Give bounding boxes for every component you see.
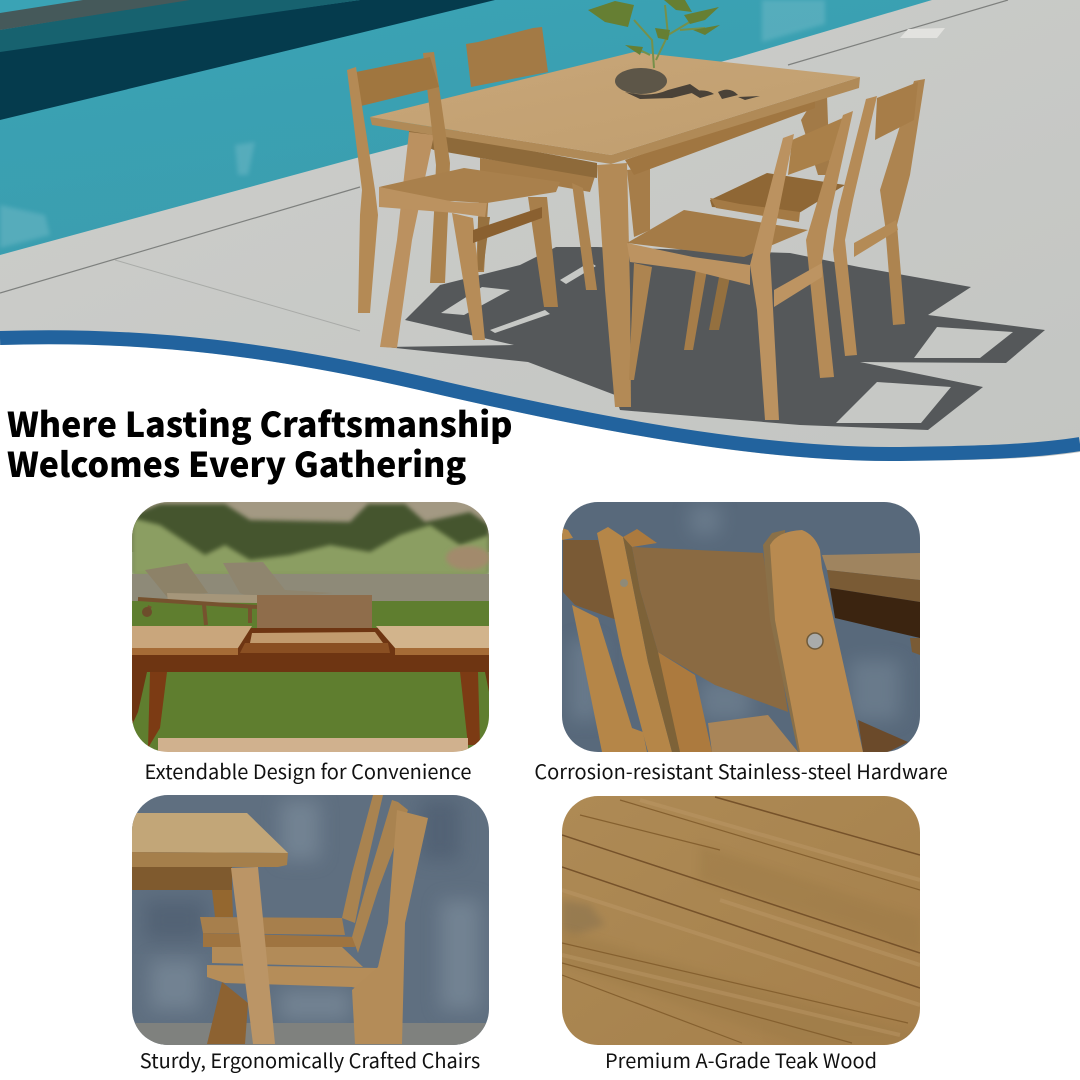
table leg [910,638,920,655]
table edge [827,570,920,602]
post 3 top [623,529,657,547]
drain cover [900,28,945,38]
wall dark blotches [145,800,460,940]
backrest [875,82,918,140]
table apron right [625,95,815,175]
stretcher [473,207,542,243]
photo: chair backrest close-up [562,502,920,752]
right leg [528,197,558,307]
blue-grey wall [132,795,489,1045]
fine seams [562,800,920,1043]
table top [822,553,920,580]
wall blotches [150,800,480,1020]
right post [806,111,853,378]
front leg [629,263,652,380]
rear leg [572,183,597,290]
panel: teak wood [562,796,920,1074]
bolt [807,633,823,649]
rear post [342,795,383,923]
deep pool shadow [0,0,495,120]
pink flowers [446,546,490,570]
concrete deck [0,0,1080,470]
table leg right [801,96,830,175]
leaves [588,0,720,55]
table left leaf [132,626,252,648]
rear table leg top [212,890,233,917]
backrest [466,27,548,87]
raised leaf [257,595,372,628]
far left leg [132,672,147,725]
lower frame [480,158,597,192]
middle rail [203,933,358,947]
blue wave band [0,337,1080,454]
table top edge [370,77,860,164]
back left chair [466,27,597,290]
front backrest [632,547,788,712]
seat glimpse [708,715,798,752]
table apron left [409,128,597,178]
heading line 2: Welcomes Every Gathering [7,438,466,487]
floor planks [132,1023,489,1046]
centre under edge [240,643,390,653]
caption: Extendable Design for Convenience [145,756,471,785]
table underside [830,588,920,638]
back leg under table [627,167,650,237]
panel: extendable design [132,502,490,785]
back post [347,67,378,313]
plant shadow on table [625,84,760,100]
seat apron [627,243,750,285]
rear chair back [563,540,617,620]
post 2 [597,527,672,752]
deck strip [158,738,468,752]
front leg [452,213,485,340]
photo: chairs at table [132,795,489,1046]
lounger wheel [142,607,152,617]
front post edge [763,530,800,752]
flowering bushes [132,518,489,576]
seat front lip [710,198,800,222]
table and chair shadows [386,247,1045,430]
right front chair [627,111,853,420]
left frame [572,605,647,752]
blue-grey wall [562,502,920,752]
table leg centre [597,163,631,407]
table gap backing [235,628,400,656]
post 3 lower [658,652,712,752]
right post [880,79,925,325]
table top [132,813,288,853]
left post [833,96,877,356]
table top surface [370,52,860,155]
front rail [207,965,377,993]
near lounger seat [167,593,257,603]
leaf edges [132,648,238,655]
white lower page [0,344,1080,1080]
right leaf edge [395,648,489,655]
sky and hills [132,502,489,552]
right back chair [710,79,925,356]
wall blotches [570,505,900,720]
upper seat [200,917,345,935]
trees [132,504,489,575]
table [370,52,860,407]
small bolt [620,579,628,587]
rear leg [478,217,490,270]
middle post [352,800,408,953]
panel: stainless-steel hardware [534,502,948,785]
rear table leg bottom [207,982,248,1044]
front post [352,810,428,1044]
table centre [250,632,383,643]
backrest [788,117,845,175]
table leg front left [380,132,434,348]
deck joint lines [0,0,1008,293]
left chair [347,52,560,340]
far right leg [485,672,489,692]
far leg [709,277,730,330]
pool reflection [0,0,825,248]
seat [379,168,560,203]
table apron [132,867,232,890]
backrest [356,57,439,106]
front post [770,530,863,752]
lawn [132,601,489,751]
left leg [148,672,167,748]
dark knot [562,900,605,935]
caption: Premium A-Grade Teak Wood [605,1045,877,1074]
swimming pool [0,0,932,255]
left post [750,134,794,420]
plank seams [562,797,920,988]
stone wall [132,574,489,601]
seat [627,210,808,257]
heading [7,398,512,487]
caption: Sturdy, Ergonomically Crafted Chairs [140,1045,480,1074]
lower seat [212,947,363,967]
seat [710,173,845,213]
rear post [423,52,450,283]
apron [132,655,489,672]
far lounger [223,562,329,595]
wood base [562,796,920,1045]
right leg [460,672,480,745]
photo: teak grain [562,796,920,1045]
rail [854,220,898,257]
near lounger back [145,563,208,597]
bowl [615,68,667,94]
post 3 edge [623,537,680,752]
heading line 1: Where Lasting Craftsmanship [7,398,512,447]
rail [774,263,822,307]
stems [634,5,705,68]
far leg [476,170,490,272]
plant in bowl [588,0,720,94]
pool teal wall band [0,0,360,52]
dark seat [858,720,908,752]
panel: ergonomic chairs [132,795,489,1074]
faint joint [115,260,360,331]
seat apron [379,187,487,217]
table edge [132,852,288,867]
rear nub [562,528,573,540]
shadow light gaps [441,262,1013,423]
mid legs [684,270,707,350]
table leg [231,867,275,1044]
table right leaf [376,626,489,648]
lighter grain [562,800,920,1035]
darker plank tones [562,845,920,1045]
lounger frame [138,599,257,625]
pool grey band [0,0,190,30]
photo: extendable table on lawn [132,502,490,752]
caption: Corrosion-resistant Stainless-steel Hardware [534,756,948,785]
